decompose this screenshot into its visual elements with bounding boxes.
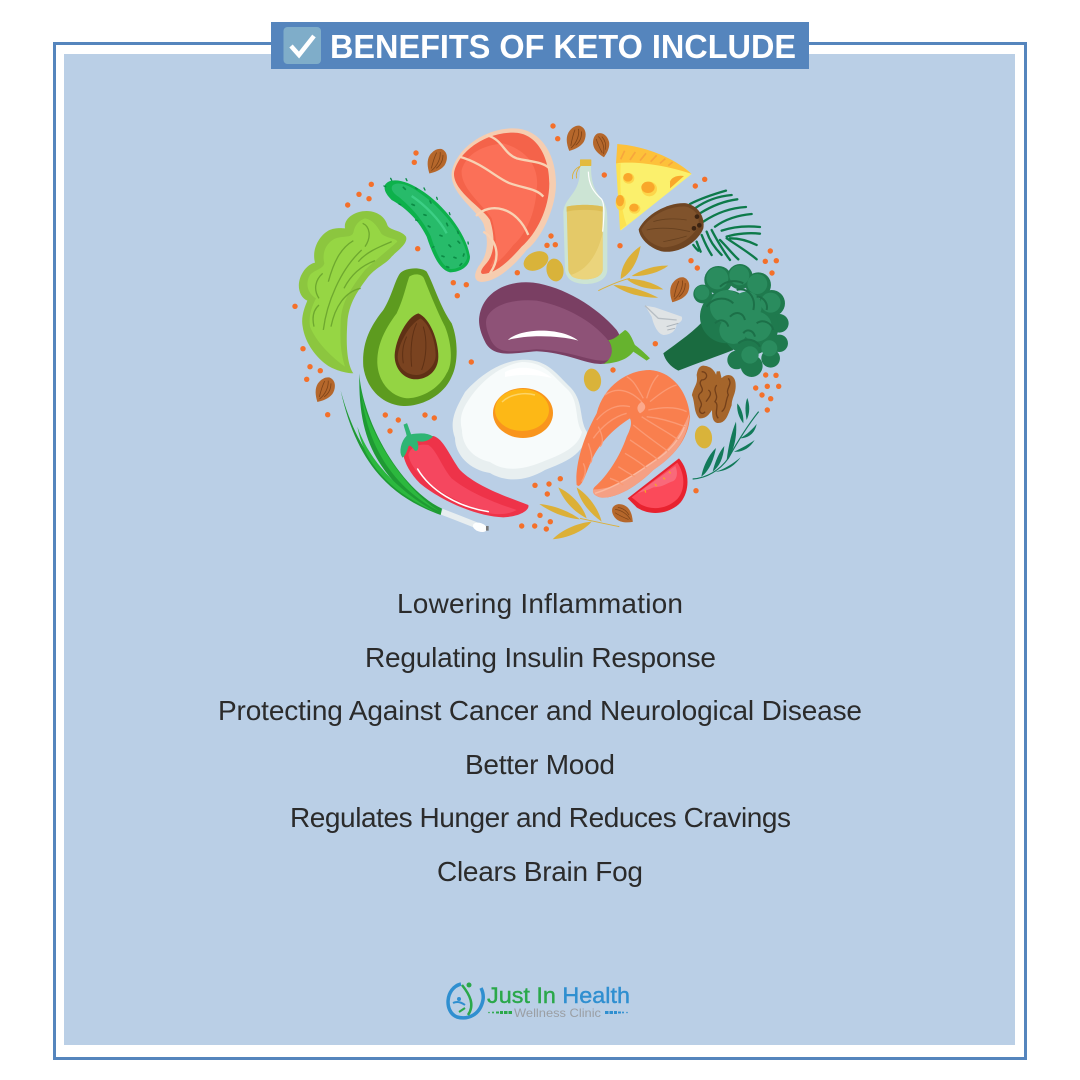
almonds bbox=[313, 124, 691, 526]
benefit 6: Clears Brain Fog bbox=[437, 856, 643, 887]
upper wheat sprig bbox=[598, 246, 668, 298]
cheese bbox=[616, 144, 692, 231]
salmon steak bbox=[576, 370, 690, 498]
lettuce bbox=[299, 211, 406, 373]
mortar and pestle bbox=[645, 306, 682, 335]
orange seed dots bbox=[292, 123, 781, 532]
benefit 2: Regulating Insulin Response bbox=[365, 642, 716, 673]
logo emblem bbox=[448, 982, 483, 1018]
title text: BENEFITS OF KETO INCLUDE bbox=[330, 28, 796, 65]
icon: check box bbox=[284, 27, 321, 64]
eggplant bbox=[479, 282, 650, 364]
rosemary sprig bbox=[693, 398, 759, 479]
benefit 1: Lowering Inflammation bbox=[397, 588, 683, 619]
salmon fillet bbox=[452, 128, 556, 282]
lower wheat sprig bbox=[539, 487, 619, 539]
logo bbox=[448, 982, 630, 1020]
benefit 3: Protecting Against Cancer and Neurological Disease bbox=[218, 695, 862, 726]
green onion bbox=[341, 373, 489, 534]
food illustration circle bbox=[292, 123, 789, 539]
palm frond bbox=[690, 191, 760, 260]
logo tagline: Wellness Clinic bbox=[514, 1006, 601, 1020]
chili pepper bbox=[401, 424, 528, 517]
title banner bbox=[271, 22, 809, 69]
olives bbox=[520, 247, 714, 450]
coconut and palm leaf bbox=[639, 191, 760, 260]
walnut bbox=[694, 367, 734, 421]
benefit 5: Regulates Hunger and Reduces Cravings bbox=[290, 802, 791, 833]
olive oil bottle bbox=[563, 159, 607, 284]
logo dots bbox=[488, 1011, 628, 1014]
benefits list bbox=[218, 588, 862, 887]
fried egg bbox=[453, 360, 587, 479]
tomato slice bbox=[628, 458, 687, 513]
avocado bbox=[363, 268, 457, 406]
benefit 4: Better Mood bbox=[465, 749, 615, 780]
logo name: Just In Health bbox=[487, 983, 630, 1008]
cucumber bbox=[384, 178, 470, 272]
broccoli bbox=[663, 264, 789, 377]
